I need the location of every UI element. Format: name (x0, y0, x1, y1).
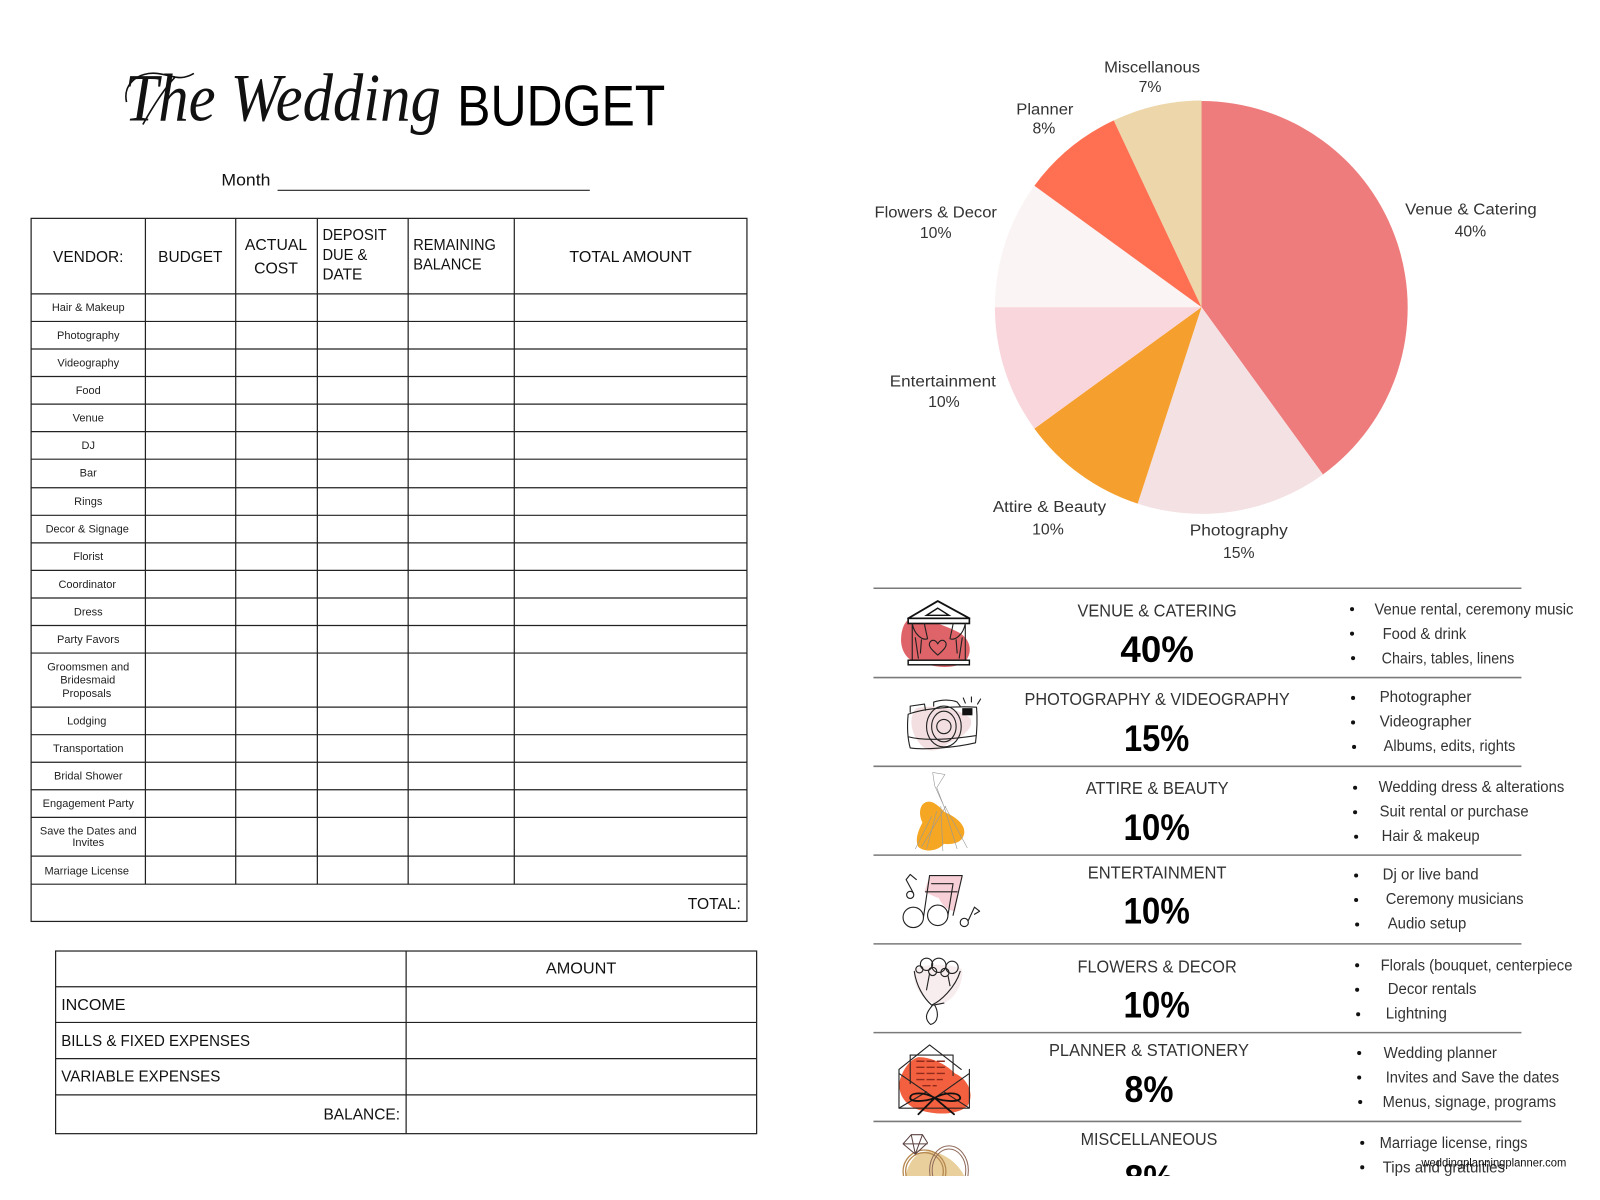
vendor names (40, 302, 137, 877)
photography heading: PHOTOGRAPHY & VIDEOGRAPHY (1024, 689, 1290, 709)
photography bullet list: Videographer (1380, 714, 1471, 731)
pie labels: 10% (928, 394, 960, 411)
flowers percent: 10% (1123, 984, 1190, 1025)
vendor names: Photography (57, 330, 120, 342)
pie labels: Entertainment (890, 374, 997, 391)
vendor names: Food (76, 385, 101, 397)
entertainment percent: 10% (1123, 890, 1190, 931)
table header: BUDGET (158, 249, 223, 266)
flowers bullet list: Decor rentals (1388, 981, 1477, 998)
entertainment bullet list: Audio setup (1388, 916, 1467, 933)
vendor budget table (31, 218, 747, 921)
icon: venue stage (901, 601, 970, 667)
panel: photography and videography (908, 689, 1515, 759)
photography bullet list (1351, 689, 1515, 755)
table header (53, 227, 692, 284)
miscellaneous bullet list (1360, 1135, 1528, 1176)
vendor names: Videography (57, 357, 120, 369)
balance table: INCOME (61, 997, 126, 1014)
pie labels: 8% (1032, 121, 1055, 138)
attire percent: 10% (1123, 807, 1190, 848)
vendor names: Transportation (53, 743, 124, 755)
panel: flowers and decor (914, 956, 1573, 1025)
table header: BALANCE (413, 256, 482, 273)
panel: miscellaneous (903, 1129, 1528, 1199)
pie labels (874, 59, 1537, 562)
entertainment bullet list: Dj or live band (1383, 867, 1479, 884)
pie labels: 10% (920, 225, 952, 242)
vendor names: Rings (74, 496, 103, 508)
title: BUDGET (457, 75, 665, 139)
table header: TOTAL AMOUNT (569, 249, 692, 266)
total label: TOTAL: (688, 896, 741, 913)
balance table: BILLS & FIXED EXPENSES (61, 1033, 250, 1050)
vendor names: Invites (72, 837, 105, 849)
pie labels: 7% (1139, 79, 1161, 96)
vendor names: Hair & Makeup (52, 302, 125, 314)
planner bullet list: Wedding planner (1384, 1045, 1497, 1062)
planner percent: 8% (1124, 1069, 1173, 1110)
vendor names: Florist (73, 551, 103, 563)
pie labels: Photography (1190, 523, 1288, 540)
vendor names: Dress (74, 606, 103, 618)
balance table: VARIABLE EXPENSES (61, 1069, 220, 1086)
pie labels: Attire & Beauty (993, 499, 1106, 516)
attire bullet list: Hair & makeup (1382, 828, 1480, 845)
vendor names: Party Favors (57, 634, 120, 646)
title: The Wedding (124, 60, 441, 135)
miscellaneous bullet list: Tips and gratuities (1383, 1159, 1505, 1176)
miscellaneous bullet list: Marriage license, rings (1380, 1135, 1528, 1152)
vendor names: Engagement Party (43, 798, 134, 810)
venue percent: 40% (1120, 629, 1194, 670)
table header: DUE & (322, 247, 368, 264)
photography bullet list: Albums, edits, rights (1384, 738, 1515, 755)
balance table: BALANCE: (323, 1106, 400, 1123)
vendor names: Decor & Signage (46, 524, 129, 536)
balance table: AMOUNT (546, 960, 617, 977)
venue bullet list: Chairs, tables, linens (1382, 650, 1514, 667)
vendor names: Proposals (62, 688, 112, 700)
vendor names: Coordinator (58, 579, 116, 591)
table header: ACTUAL (245, 237, 307, 254)
planner bullet list: Invites and Save the dates (1386, 1070, 1559, 1087)
icon: envelope invitation (899, 1045, 971, 1114)
vendor names: Bridesmaid (60, 675, 115, 687)
vendor names: Marriage License (44, 865, 129, 877)
vendor names: DJ (82, 440, 95, 452)
miscellaneous heading: MISCELLANEOUS (1081, 1129, 1217, 1149)
panel: attire and beauty (915, 772, 1564, 851)
panel: entertainment (903, 863, 1524, 933)
pie labels: Venue & Catering (1405, 201, 1537, 218)
balance table (56, 951, 757, 1134)
vendor names: Bar (80, 468, 97, 480)
watermark: weddingplanningplanner.com (1420, 1156, 1566, 1169)
flowers bullet list: Lightning (1386, 1005, 1447, 1022)
vendor names: Save the Dates and (40, 826, 137, 838)
venue bullet list (1350, 601, 1574, 667)
icon: rings (903, 1135, 968, 1195)
entertainment bullet list (1354, 867, 1524, 933)
attire bullet list: Wedding dress & alterations (1379, 779, 1564, 796)
miscellaneous percent: 8% (1124, 1158, 1173, 1199)
vendor names: Lodging (67, 715, 106, 727)
table header: VENDOR: (53, 249, 123, 266)
table header: DATE (322, 267, 362, 284)
photography percent: 15% (1124, 718, 1189, 759)
flowers bullet list (1355, 957, 1573, 1022)
planner heading: PLANNER & STATIONERY (1049, 1040, 1249, 1060)
flowers bullet list: Florals (bouquet, centerpiece (1381, 957, 1573, 974)
vendor names: Groomsmen and (47, 661, 129, 673)
title (124, 60, 665, 139)
icon: camera (908, 697, 981, 750)
attire heading: ATTIRE & BEAUTY (1086, 778, 1229, 798)
table header: DEPOSIT (322, 227, 387, 244)
icon: wedding dress (915, 772, 967, 851)
pie chart (995, 101, 1408, 514)
entertainment heading: ENTERTAINMENT (1088, 863, 1227, 883)
venue bullet list: Food & drink (1383, 626, 1466, 643)
pie labels: 15% (1223, 545, 1255, 562)
table header: COST (254, 260, 298, 277)
pie labels: Flowers & Decor (874, 204, 997, 221)
icon: bouquet (914, 958, 962, 1024)
icon: music notes (903, 874, 980, 928)
vendor names: Bridal Shower (54, 771, 123, 783)
entertainment bullet list: Ceremony musicians (1386, 891, 1524, 908)
venue heading: VENUE & CATERING (1078, 600, 1237, 620)
pie labels: 10% (1032, 522, 1064, 539)
attire bullet list: Suit rental or purchase (1380, 803, 1529, 820)
planner bullet list: Menus, signage, programs (1383, 1094, 1556, 1111)
flowers heading: FLOWERS & DECOR (1078, 956, 1237, 976)
planner bullet list (1357, 1045, 1559, 1111)
panel: planner and stationery (899, 1040, 1559, 1114)
vendor names: Venue (73, 412, 104, 424)
pie labels: Miscellanous (1104, 59, 1200, 76)
pie labels: 40% (1455, 224, 1486, 241)
panel: venue and catering (901, 600, 1574, 670)
attire bullet list (1353, 779, 1564, 845)
pie labels: Planner (1016, 101, 1073, 118)
month field: Month (221, 172, 270, 190)
table header: REMAINING (413, 237, 496, 254)
photography bullet list: Photographer (1380, 689, 1471, 706)
venue bullet list: Venue rental, ceremony music (1374, 601, 1574, 618)
